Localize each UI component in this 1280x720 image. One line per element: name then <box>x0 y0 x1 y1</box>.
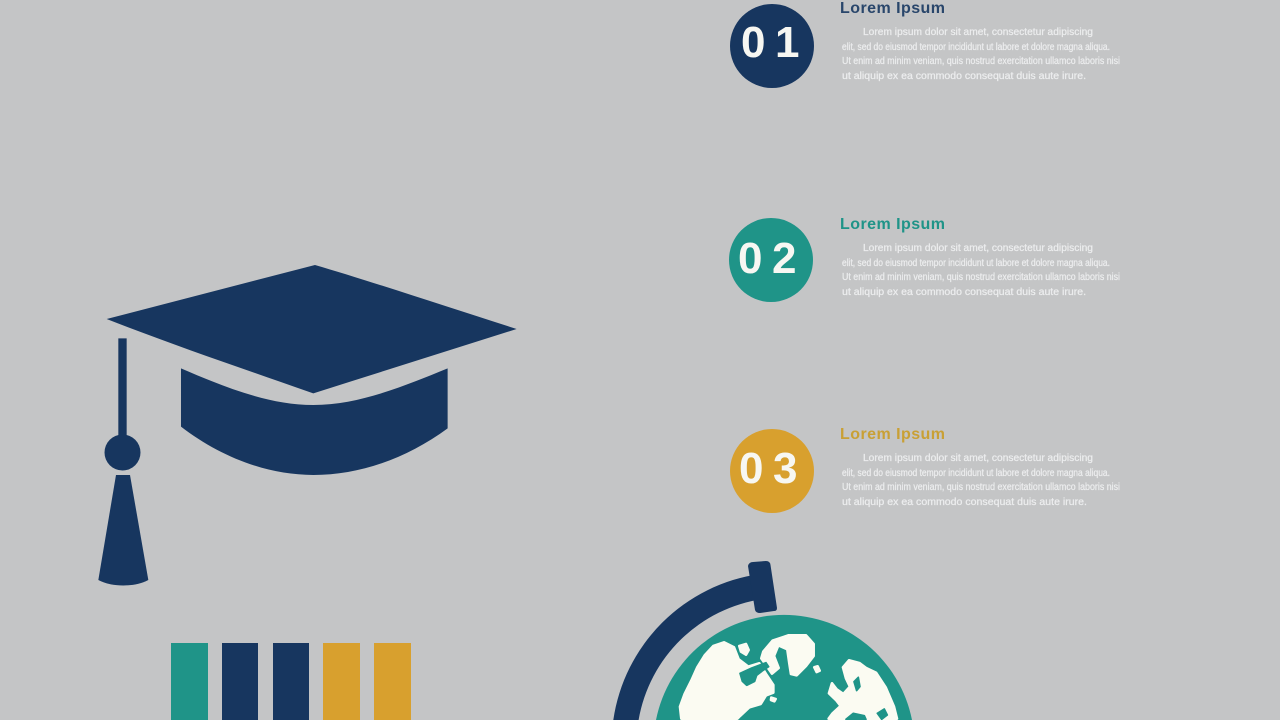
item 01 <box>730 0 1120 88</box>
icon: globe <box>613 561 912 720</box>
body text 01 <box>842 27 1120 82</box>
badge 02 <box>729 218 813 302</box>
icon: graduation cap <box>98 265 517 585</box>
globe continents <box>680 635 897 719</box>
badge 01 <box>730 4 814 88</box>
body text 03: Lorem ipsum dolor sit amet, consectetur adipiscing <box>863 453 1093 464</box>
body text 01: elit, sed do eiusmod tempor incididunt ut labore et dolore magna aliqua. <box>842 42 1110 53</box>
body text 02: Ut enim ad minim veniam, quis nostrud exercitation ullamco laboris nisi <box>842 272 1120 283</box>
body text 01: Lorem ipsum dolor sit amet, consectetur adipiscing <box>863 27 1093 38</box>
heading 01: Lorem Ipsum <box>840 0 945 17</box>
body text 01: Ut enim ad minim veniam, quis nostrud exercitation ullamco laboris nisi <box>842 56 1120 67</box>
body text 03: elit, sed do eiusmod tempor incididunt ut labore et dolore magna aliqua. <box>842 468 1110 479</box>
body text 02 <box>842 243 1120 298</box>
body text 03: Ut enim ad minim veniam, quis nostrud exercitation ullamco laboris nisi <box>842 482 1120 493</box>
body text 02: Lorem ipsum dolor sit amet, consectetur adipiscing <box>863 243 1093 254</box>
body text 02: ut aliquip ex ea commodo consequat duis aute irure. <box>842 287 1086 298</box>
globe arm <box>613 561 777 720</box>
globe water inlets <box>740 663 887 719</box>
globe sphere <box>656 615 912 720</box>
body text 03: ut aliquip ex ea commodo consequat duis aute irure. <box>842 497 1087 508</box>
body text 03 <box>842 453 1120 508</box>
item 03 <box>730 426 1120 513</box>
badge 01: 01 <box>741 18 799 67</box>
badge 03 <box>730 429 814 513</box>
body text 02: elit, sed do eiusmod tempor incididunt ut labore et dolore magna aliqua. <box>842 258 1110 269</box>
badge 03: 03 <box>739 444 797 493</box>
heading 02: Lorem Ipsum <box>840 216 945 233</box>
body text 01: ut aliquip ex ea commodo consequat duis aute irure. <box>842 71 1086 82</box>
heading 03: Lorem Ipsum <box>840 426 945 443</box>
item 02 <box>729 216 1120 302</box>
bar chart <box>171 643 411 720</box>
badge 02: 02 <box>738 234 796 283</box>
